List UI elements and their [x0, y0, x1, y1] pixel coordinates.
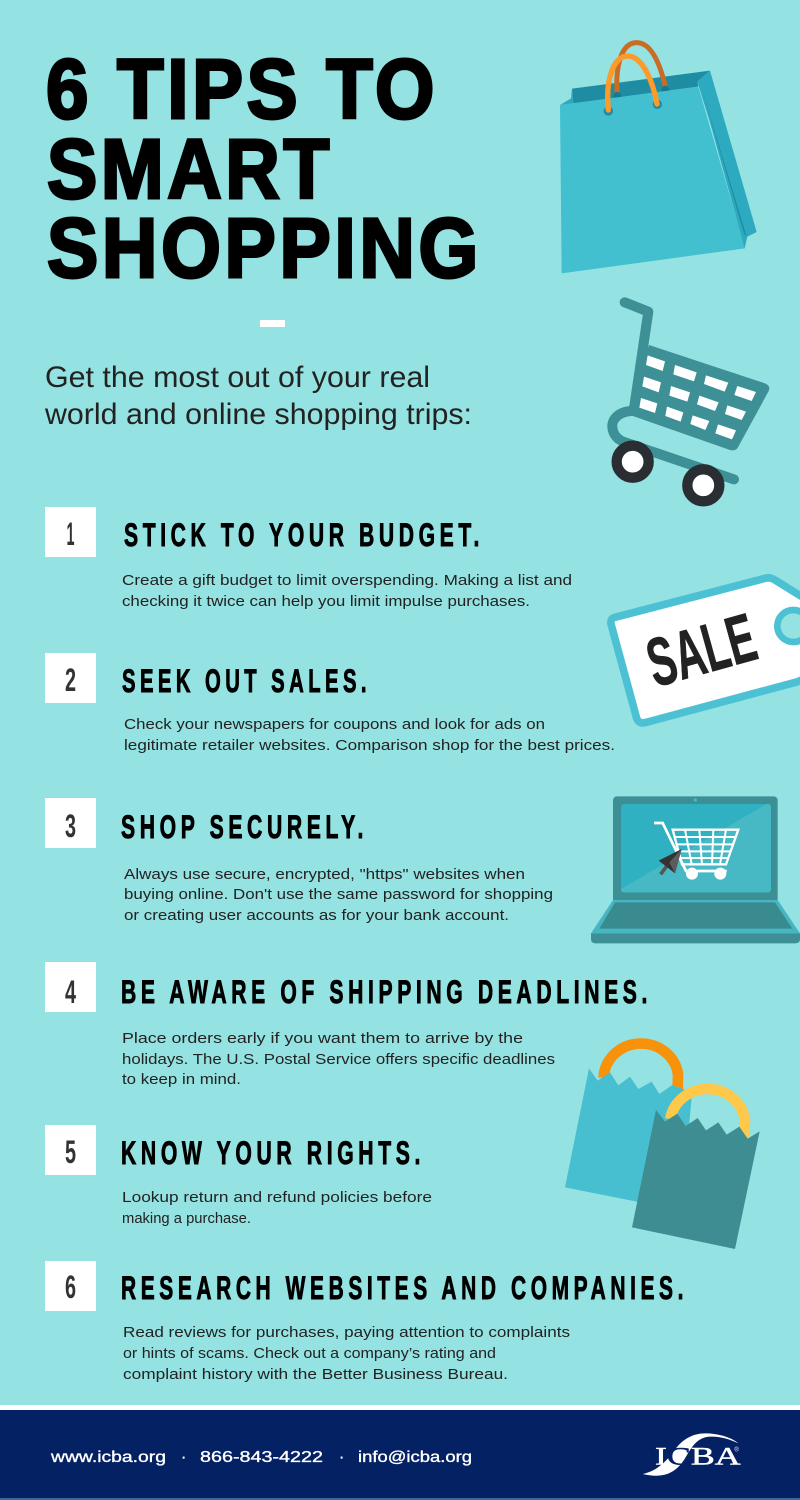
- step 6: [45, 1261, 688, 1383]
- number badge 2: [45, 653, 96, 703]
- footer contact details: 866-843-4222: [200, 1449, 323, 1466]
- body 1: Create a gift budget to limit overspending. Making a list and: [122, 572, 572, 589]
- body 6: Read reviews for purchases, paying attention to complaints: [123, 1324, 570, 1341]
- logo: ICBA: ®: [734, 1447, 739, 1454]
- body 2: [124, 716, 615, 754]
- number badge 4: [45, 962, 96, 1012]
- step 4: [45, 962, 652, 1088]
- logo: ICBA: ICBA: [655, 1442, 742, 1470]
- number badge 1: [45, 507, 96, 557]
- title: 6 TIPS TO: [46, 42, 438, 136]
- heading 1: STICK TO YOUR BUDGET.: [124, 517, 484, 553]
- footer contact details: ·: [181, 1449, 186, 1466]
- body 5: Lookup return and refund policies before: [122, 1189, 432, 1206]
- title accent dash: [260, 320, 285, 327]
- number badge 1: 1: [66, 516, 74, 552]
- body 1: checking it twice can help you limit impulse purchases.: [122, 593, 530, 610]
- body 2: legitimate retailer websites. Comparison shop for the best prices.: [124, 737, 615, 754]
- number badge 5: 5: [65, 1134, 76, 1170]
- number badge 2: 2: [65, 662, 76, 698]
- title: SMART: [47, 122, 333, 216]
- logo: ICBA: [643, 1433, 742, 1476]
- body 5: [122, 1189, 432, 1227]
- body 3: or creating user accounts as for your bank account.: [124, 907, 509, 924]
- body 2: Check your newspapers for coupons and look for ads on: [124, 716, 545, 733]
- title: [46, 42, 482, 295]
- footer band: [0, 1405, 800, 1500]
- title: SHOPPING: [47, 201, 482, 295]
- number badge 6: 6: [65, 1269, 76, 1305]
- body 3: buying online. Don't use the same password for shopping: [124, 886, 553, 903]
- number badge 4: 4: [65, 974, 76, 1010]
- step 2: [45, 653, 615, 754]
- number badge 5: [45, 1125, 96, 1175]
- number badge 3: 3: [65, 808, 76, 844]
- subtitle: [44, 361, 472, 431]
- icon: two paper bags: [565, 1044, 760, 1249]
- footer contact details: [50, 1449, 472, 1466]
- footer contact details: ·: [339, 1449, 344, 1466]
- body 6: or hints of scams. Check out a company’s rating and: [123, 1345, 496, 1362]
- body 4: [122, 1030, 555, 1088]
- body 5: making a purchase.: [122, 1210, 251, 1227]
- body 4: Place orders early if you want them to arrive by the: [122, 1030, 523, 1047]
- number badge 6: [45, 1261, 96, 1311]
- footer contact details: www.icba.org: [50, 1449, 166, 1466]
- body 3: Always use secure, encrypted, "https" websites when: [124, 866, 525, 883]
- body 4: holidays. The U.S. Postal Service offers specific deadlines: [122, 1051, 555, 1068]
- heading 2: SEEK OUT SALES.: [122, 663, 371, 699]
- body 1: [122, 572, 572, 610]
- step 3: [45, 798, 553, 924]
- body 6: complaint history with the Better Business Bureau.: [123, 1366, 508, 1383]
- icon: laptop with cart: [591, 796, 800, 943]
- heading 5: KNOW YOUR RIGHTS.: [121, 1135, 425, 1171]
- heading 3: SHOP SECURELY.: [121, 809, 368, 845]
- body 4: to keep in mind.: [122, 1071, 241, 1088]
- number badge 3: [45, 798, 96, 848]
- step 5: [45, 1125, 432, 1227]
- icon: shopping bag: [560, 43, 757, 273]
- body 6: [123, 1324, 570, 1383]
- footer contact details: info@icba.org: [358, 1449, 472, 1466]
- subtitle: Get the most out of your real: [45, 361, 430, 394]
- icon: shopping cart: [612, 302, 769, 501]
- body 3: [124, 866, 553, 924]
- subtitle: world and online shopping trips:: [44, 398, 472, 431]
- step 1: [45, 507, 572, 610]
